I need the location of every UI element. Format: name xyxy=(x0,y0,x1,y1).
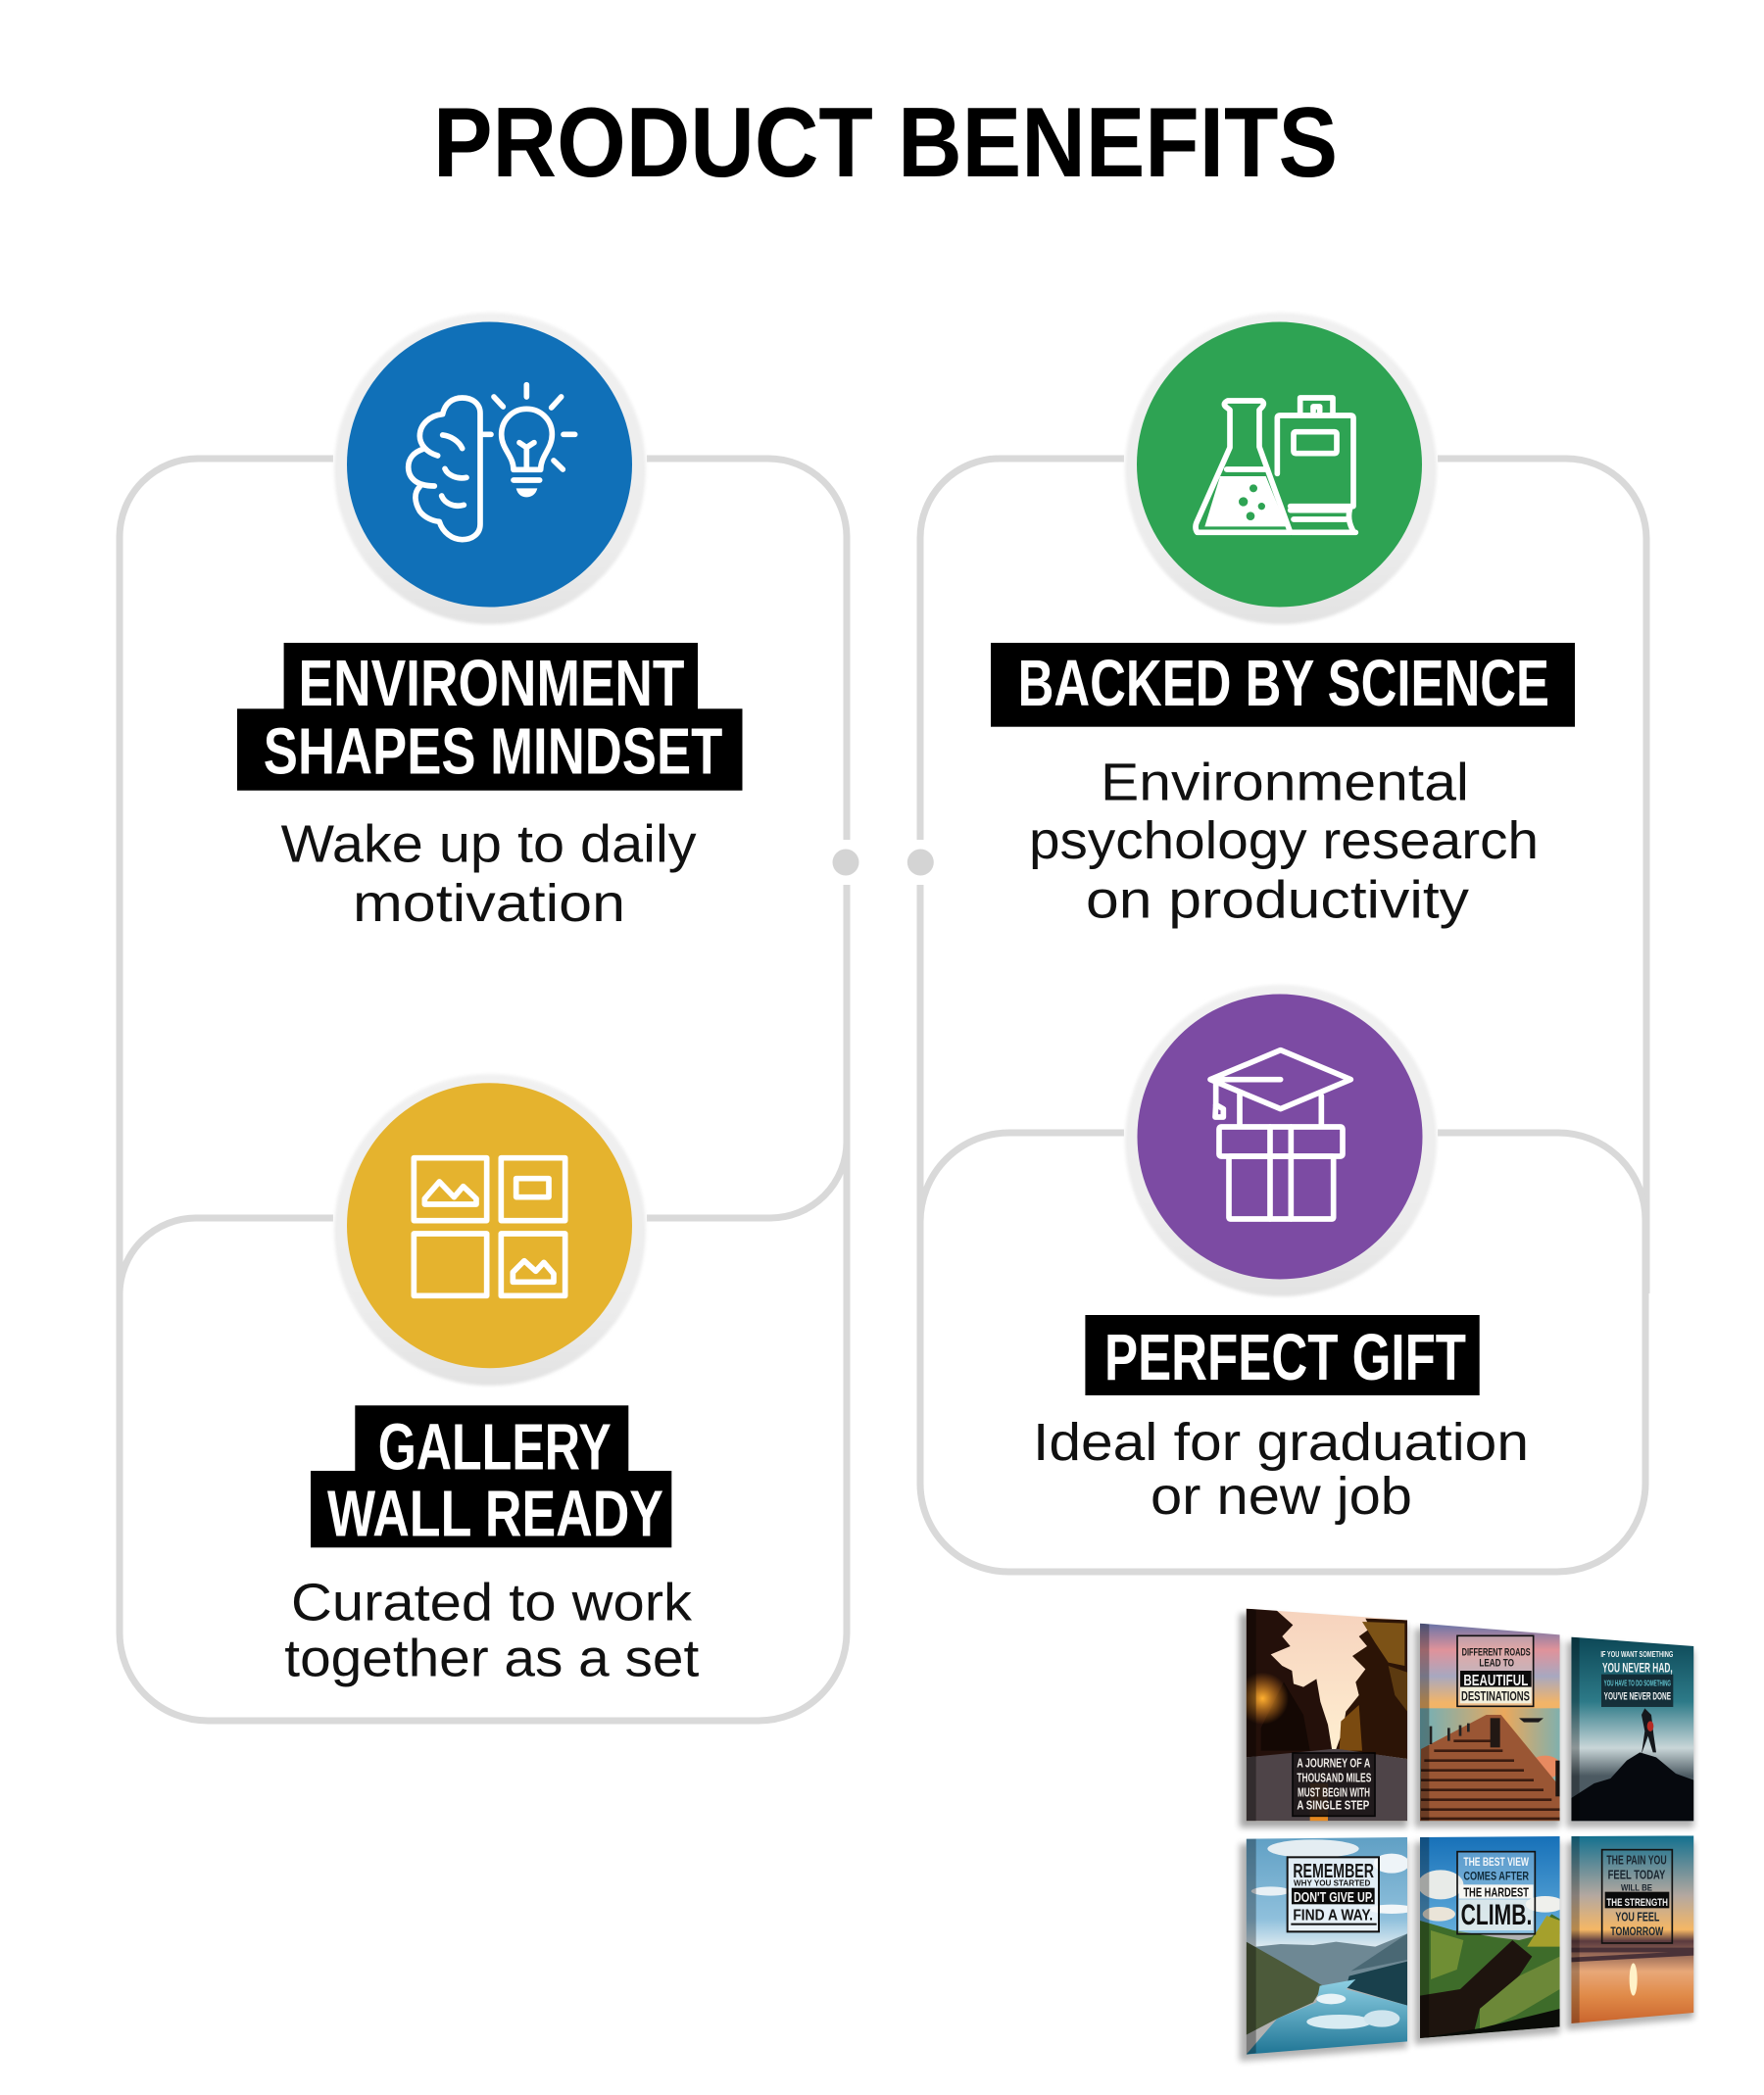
panel: gallery wall ready xyxy=(120,1074,847,1721)
description: environmental psychology research: Environmental xyxy=(1101,754,1469,812)
canvas: green mountains xyxy=(1414,1835,1565,2045)
canvas: green mountains: THE HARDEST xyxy=(1463,1885,1529,1899)
description: wake up to daily motivation xyxy=(281,814,697,933)
canvas: sunset beach: WILL BE xyxy=(1621,1882,1652,1892)
canvas: sunset beach: YOU FEEL xyxy=(1615,1911,1660,1924)
description: wake up to daily motivation: Wake up to daily xyxy=(281,814,697,873)
panel: backed by science xyxy=(907,313,1646,1293)
canvas: mountain hiker: IF YOU WANT SOMETHING xyxy=(1600,1649,1673,1659)
canvas: journey road: A JOURNEY OF A xyxy=(1297,1755,1371,1770)
description: ideal for graduation: or new job xyxy=(1151,1467,1412,1526)
canvas: mountain hiker xyxy=(1566,1636,1695,1827)
canvas: journey road xyxy=(1237,1607,1408,1827)
description: environmental psychology research: on productivity xyxy=(1086,871,1469,930)
icon: gallery wall frames xyxy=(414,1158,565,1295)
canvas: mountain hiker: YOU'VE NEVER DONE xyxy=(1604,1691,1671,1703)
canvas: mountain lake: WHY YOU STARTED xyxy=(1294,1878,1370,1888)
canvas: green mountains: THE BEST VIEW xyxy=(1463,1855,1529,1869)
canvas: sunset beach xyxy=(1566,1835,1695,2030)
heading: perfect gift: PERFECT GIFT xyxy=(1104,1321,1466,1394)
canvas: sunset beach: THE STRENGTH xyxy=(1606,1897,1668,1909)
canvas: lake dock xyxy=(1414,1624,1561,1827)
canvas: journey road: THOUSAND MILES xyxy=(1297,1771,1371,1785)
canvas: mountain lake xyxy=(1240,1835,1414,2061)
icon: graduation cap on gift box xyxy=(1210,1050,1350,1219)
description: environmental psychology research: psychology research xyxy=(1029,811,1539,870)
heading: environment shapes mindset: SHAPES MINDSET xyxy=(264,714,722,788)
canvas: journey road: A SINGLE STEP xyxy=(1297,1798,1369,1813)
description: curated to work together xyxy=(284,1573,699,1688)
description: wake up to daily motivation: motivation xyxy=(353,874,625,933)
panel: perfect gift xyxy=(920,985,1645,1572)
heading: backed by science: BACKED BY SCIENCE xyxy=(1018,647,1549,720)
canvas: mountain hiker: YOU HAVE TO DO SOMETHING xyxy=(1604,1679,1671,1688)
canvas: mountain lake: REMEMBER xyxy=(1293,1861,1374,1882)
heading: environment shapes mindset: ENVIRONMENT xyxy=(298,647,685,720)
canvas: lake dock: BEAUTIFUL xyxy=(1463,1673,1528,1689)
heading: gallery wall ready: WALL READY xyxy=(327,1478,663,1551)
canvas: mountain hiker: YOU NEVER HAD, xyxy=(1602,1660,1673,1676)
canvas: sunset beach: TOMORROW xyxy=(1610,1924,1664,1938)
heading: environment shapes mindset xyxy=(237,643,743,791)
description: environmental psychology research xyxy=(1029,754,1539,930)
canvas: mountain lake: FIND A WAY. xyxy=(1293,1907,1373,1924)
canvas: green mountains: CLIMB. xyxy=(1461,1899,1532,1931)
canvas: lake dock: LEAD TO xyxy=(1479,1658,1514,1670)
icon: brain and light bulb xyxy=(409,385,575,540)
canvas: sunset beach: FEEL TODAY xyxy=(1608,1867,1665,1881)
product photo: six canvas prints xyxy=(1237,1607,1695,2061)
icon: flask and book xyxy=(1196,398,1355,532)
canvas: lake dock: DIFFERENT ROADS xyxy=(1462,1646,1531,1658)
panel: environment shapes mindset xyxy=(120,313,858,1313)
description: curated to work together: Curated to work xyxy=(291,1573,693,1632)
heading: backed by science xyxy=(991,643,1575,727)
description: ideal for graduation: Ideal for graduation xyxy=(1033,1413,1529,1472)
canvas: sunset beach: THE PAIN YOU xyxy=(1606,1854,1667,1868)
description: ideal for graduation xyxy=(1033,1413,1529,1526)
canvas: lake dock: DESTINATIONS xyxy=(1461,1687,1530,1703)
canvas: mountain lake: DON'T GIVE UP. xyxy=(1294,1890,1374,1906)
canvas: journey road: MUST BEGIN WITH xyxy=(1298,1784,1370,1799)
description: curated to work together: together as a set xyxy=(284,1630,699,1688)
canvas: green mountains: COMES AFTER xyxy=(1463,1870,1529,1883)
heading: gallery wall ready: GALLERY xyxy=(378,1410,612,1484)
title: PRODUCT BENEFITS xyxy=(433,88,1338,198)
heading: gallery wall ready xyxy=(311,1405,671,1551)
